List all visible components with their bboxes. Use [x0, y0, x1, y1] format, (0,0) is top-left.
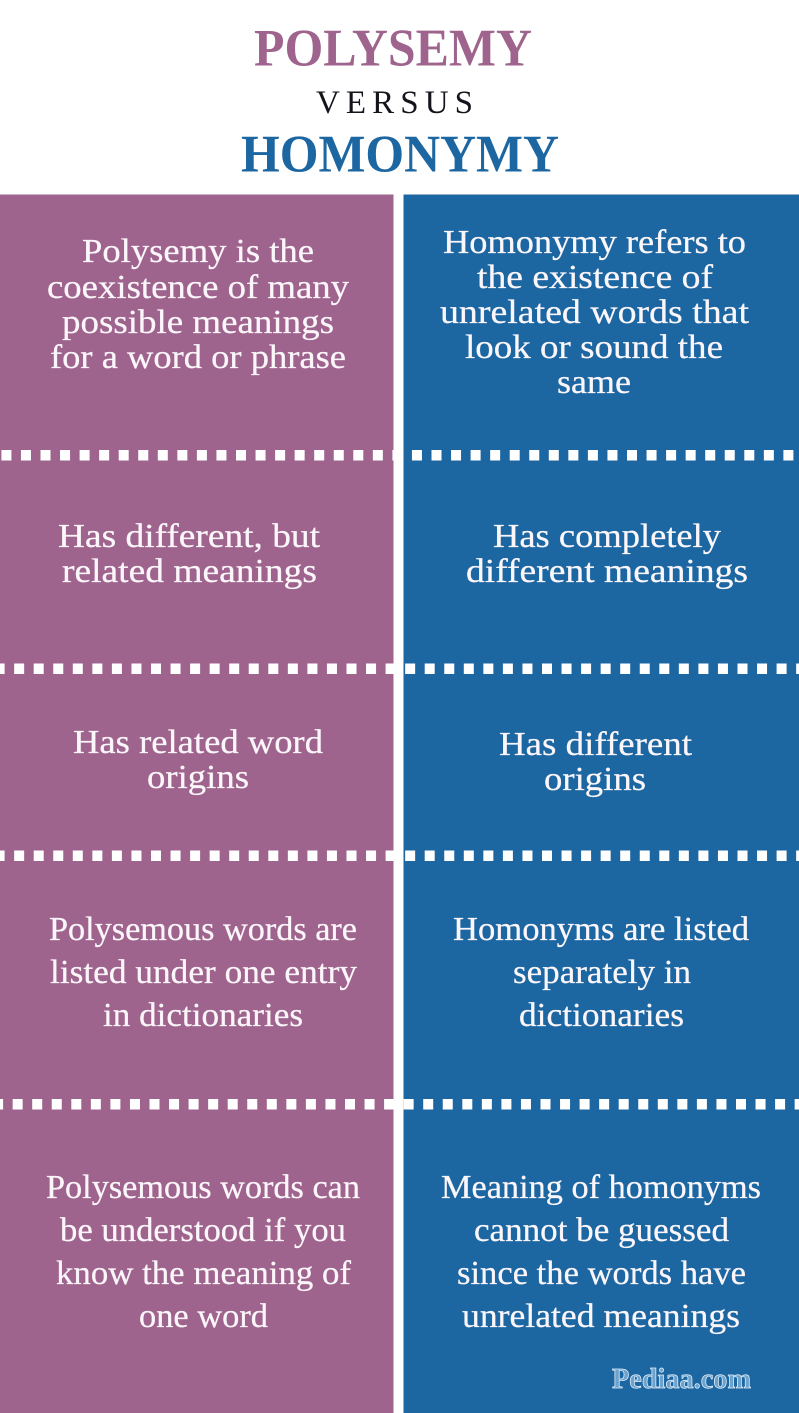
text: homonymy dictionary entries: dictionaries	[519, 997, 684, 1034]
text: homonymy origins: Has different	[499, 726, 693, 763]
heading: polysemy: POLYSEMY	[254, 20, 532, 78]
text: homonymy origins: origins	[544, 761, 646, 798]
text: polysemy dictionary entries: Polysemous words are	[49, 911, 357, 948]
text: polysemy dictionary entries: in dictionaries	[103, 997, 303, 1034]
text: homonymy definition: unrelated words that	[440, 294, 750, 331]
panel: polysemy column background	[0, 194, 394, 1413]
text: polysemy meanings: Has different, but	[58, 518, 321, 555]
text: homonymy meanings: Has completely	[493, 518, 721, 555]
text: homonymy definition: the existence of	[477, 259, 714, 296]
text: polysemy definition: possible meanings	[62, 304, 334, 341]
heading: versus: VERSUS	[316, 85, 473, 121]
row dividers	[0, 455, 799, 1104]
text: polysemy origins: origins	[147, 759, 249, 796]
text: homonymy understanding: Meaning of homonyms	[441, 1169, 761, 1206]
text: homonymy dictionary entries: separately in	[513, 954, 691, 991]
logo: Pediaa.com: Pediaa.com	[612, 1364, 751, 1395]
text: polysemy understanding: one word	[139, 1298, 268, 1335]
text: polysemy definition: coexistence of many	[47, 269, 349, 306]
text: homonymy dictionary entries: Homonyms are listed	[453, 911, 749, 948]
text: homonymy definition	[440, 224, 750, 401]
text: polysemy definition: for a word or phrase	[50, 339, 346, 376]
panel: homonymy column background	[404, 194, 799, 1413]
text: homonymy understanding: unrelated meanings	[462, 1298, 740, 1335]
text: homonymy understanding: cannot be guessed	[474, 1212, 729, 1249]
text: homonymy definition: look or sound the	[465, 329, 723, 366]
heading: homonymy: HOMONYMY	[241, 126, 559, 184]
text: homonymy definition: Homonymy refers to	[443, 224, 746, 261]
text: polysemy understanding: know the meaning of	[56, 1255, 352, 1292]
text: polysemy meanings: related meanings	[62, 553, 317, 590]
text: homonymy origins	[499, 726, 693, 798]
text: polysemy definition: Polysemy is the	[82, 233, 314, 270]
text: polysemy definition	[47, 233, 349, 376]
text: homonymy meanings	[466, 518, 748, 590]
text: homonymy dictionary entries	[453, 911, 749, 1034]
title block	[241, 20, 559, 184]
text: homonymy definition: same	[557, 364, 631, 401]
text: homonymy understanding	[441, 1169, 761, 1335]
text: polysemy origins: Has related word	[73, 724, 323, 761]
text: polysemy dictionary entries: listed under one entry	[50, 954, 357, 991]
text: homonymy understanding: since the words have	[457, 1255, 746, 1292]
text: polysemy understanding: be understood if you	[60, 1212, 346, 1249]
text: polysemy understanding: Polysemous words can	[46, 1169, 360, 1206]
text: polysemy dictionary entries	[49, 911, 357, 1034]
text: polysemy understanding	[46, 1169, 360, 1335]
text: polysemy origins	[73, 724, 323, 796]
text: polysemy meanings	[58, 518, 321, 590]
text: homonymy meanings: different meanings	[466, 553, 748, 590]
